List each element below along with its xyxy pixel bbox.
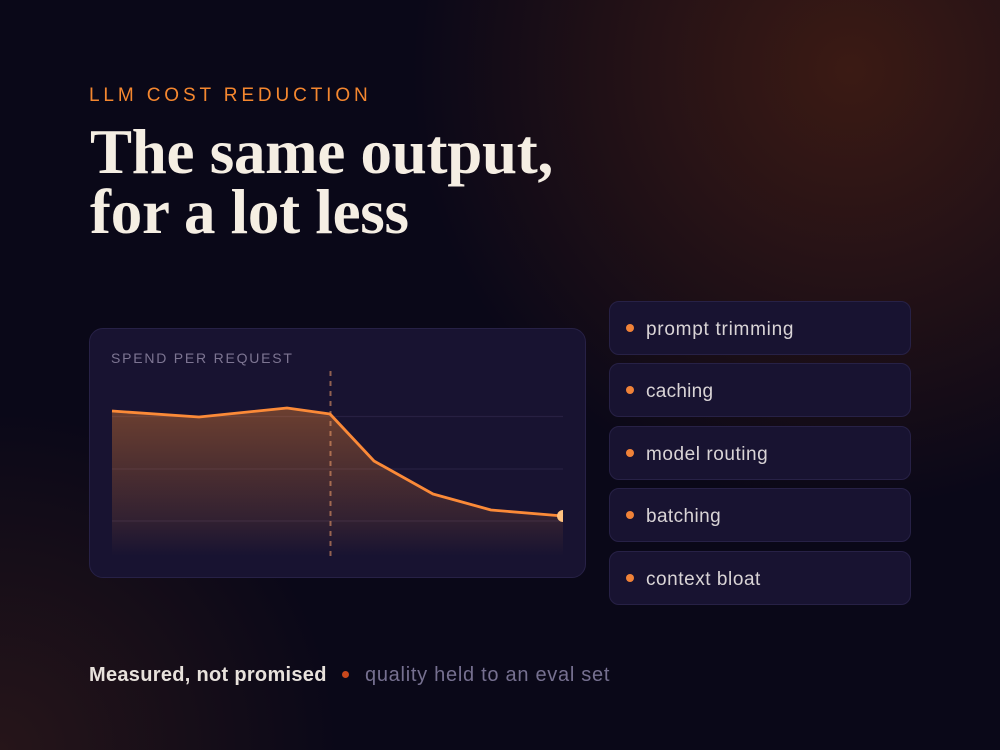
title: for a lot less xyxy=(90,177,409,247)
title: The same output, xyxy=(90,117,553,187)
line chart xyxy=(112,371,564,556)
footer: note: quality held to an eval set xyxy=(365,664,610,686)
chip: batching: batching xyxy=(646,506,721,527)
area fill xyxy=(112,408,563,556)
footer: bold statement: Measured, not promised xyxy=(89,664,327,686)
marker line xyxy=(330,371,332,556)
chip: model routing xyxy=(609,426,911,480)
chart label: SPEND PER REQUEST xyxy=(111,350,294,366)
end marker xyxy=(557,510,563,522)
eyebrow: LLM COST REDUCTION xyxy=(89,85,372,106)
panel: spend chart xyxy=(89,328,586,578)
chip: batching xyxy=(609,488,911,542)
chip: context bloat: context bloat xyxy=(646,569,761,590)
chip: prompt trimming: prompt trimming xyxy=(646,319,794,340)
chip: prompt trimming xyxy=(609,301,911,355)
title xyxy=(90,117,553,247)
chip: caching xyxy=(609,363,911,417)
footer: separator dot xyxy=(342,671,349,678)
chip: model routing: model routing xyxy=(646,444,768,465)
trend line xyxy=(112,408,563,516)
chip: context bloat xyxy=(609,551,911,605)
chip: caching: caching xyxy=(646,381,713,402)
